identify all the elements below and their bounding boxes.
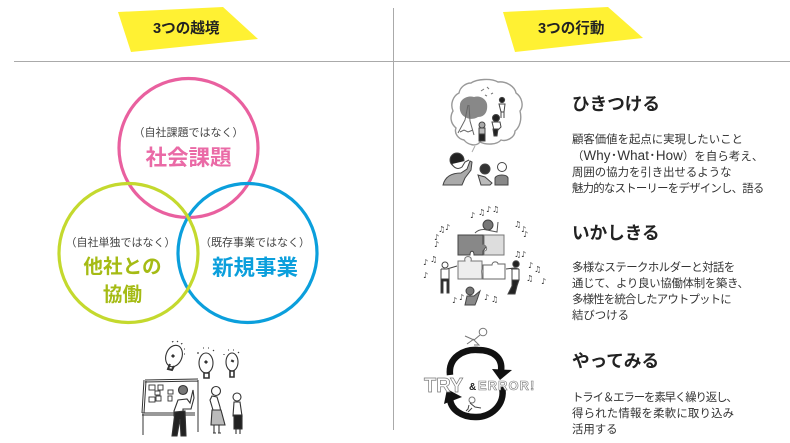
section text: いかしきる: 多様なステークホルダーと対話を bbox=[572, 262, 735, 274]
illustration: speaker and thought bubble bbox=[442, 78, 523, 186]
circle text: new business: 新規事業 bbox=[212, 256, 298, 280]
circle text: social issues bbox=[134, 126, 244, 170]
section text: ひきつける bbox=[572, 133, 764, 195]
music notes: ♫ bbox=[478, 208, 485, 217]
icon: runner figures bbox=[465, 328, 487, 412]
section text: やってみる: トライ＆エラーを素早く繰り返し、 bbox=[572, 392, 737, 404]
circle text: social issues: 社会課題 bbox=[145, 146, 232, 170]
music notes: ♪ bbox=[523, 230, 528, 239]
illustration: jigsaw puzzle team and music notes bbox=[423, 205, 546, 306]
section text: やってみる bbox=[572, 391, 737, 436]
music notes: ♫ bbox=[491, 295, 498, 304]
music notes: ♪ bbox=[484, 293, 489, 302]
circle text: co-creation with other companies: （自社単独ではなく） bbox=[66, 237, 176, 249]
music notes: ♫ bbox=[526, 274, 533, 283]
music notes: ♪ bbox=[459, 293, 464, 302]
section text: ひきつける: 周囲の協力を引き出せるような bbox=[572, 167, 731, 179]
music notes: ♫ bbox=[534, 265, 541, 274]
heading tag: 3つの行動: 3つの行動 bbox=[538, 21, 604, 37]
music notes: ♫ bbox=[438, 225, 445, 234]
section text: いかしきる: 結びつける bbox=[572, 310, 629, 322]
heading tag: 3つの越境 bbox=[118, 7, 258, 52]
section title: やってみる: やってみる bbox=[572, 351, 659, 371]
circle text: co-creation with other companies: 協働 bbox=[103, 284, 142, 306]
section text: いかしきる: 多様性を統合したアウトプットに bbox=[572, 294, 731, 306]
icon: cycle arrows bbox=[450, 350, 503, 417]
section text: ひきつける: （Why･What･How）を自ら考え、 bbox=[572, 148, 763, 163]
music notes: ♪ bbox=[541, 277, 546, 286]
section title: ひきつける: ひきつける bbox=[572, 94, 660, 114]
music notes: ♫ bbox=[430, 255, 437, 264]
illustration: try and error cycle arrows: ERROR! bbox=[478, 378, 535, 393]
music notes: ♪ bbox=[528, 261, 533, 270]
section text: いかしきる: 通じて、より良い協働体制を築き、 bbox=[572, 278, 749, 290]
circle text: co-creation with other companies bbox=[66, 236, 176, 306]
section title: いかしきる: いかしきる bbox=[572, 223, 660, 243]
circle text: co-creation with other companies: 他社との bbox=[83, 256, 162, 278]
music notes: ♪ bbox=[445, 223, 450, 232]
section text: やってみる: 得られた情報を柔軟に取り込み bbox=[572, 408, 734, 420]
music notes: ♫ bbox=[514, 250, 521, 259]
circle text: new business bbox=[200, 236, 310, 280]
music notes bbox=[423, 205, 546, 305]
music notes: ♪ bbox=[452, 296, 457, 305]
music notes: ♪ bbox=[434, 233, 439, 242]
music notes: ♪ bbox=[423, 258, 428, 267]
label: TRY & ERROR!: TRY bbox=[424, 375, 464, 397]
heading tag: 3つの越境: 3つの越境 bbox=[153, 21, 220, 37]
section text: いかしきる bbox=[572, 261, 749, 322]
music notes: ♪ bbox=[486, 205, 491, 214]
music notes: ♫ bbox=[514, 220, 521, 229]
section text: ひきつける: 魅力的なストーリーをデザインし、語る bbox=[572, 183, 764, 195]
illustration: try and error cycle arrows bbox=[424, 328, 535, 420]
music notes: ♪ bbox=[434, 240, 439, 249]
section text: やってみる: 活用する bbox=[572, 424, 618, 436]
section text: ひきつける: 顧客価値を起点に実現したいこと bbox=[572, 134, 743, 146]
venn diagram: three circles bbox=[57, 76, 319, 324]
music notes: ♫ bbox=[492, 205, 499, 214]
illustration: try and error cycle arrows: & bbox=[469, 382, 476, 393]
music notes: ♪ bbox=[423, 271, 428, 280]
circle text: new business: （既存事業ではなく） bbox=[200, 237, 310, 249]
circle text: social issues: （自社課題ではなく） bbox=[134, 127, 244, 139]
heading tag: 3つの行動 bbox=[503, 7, 643, 52]
music notes: ♪ bbox=[470, 211, 475, 220]
music notes: ♪ bbox=[521, 225, 526, 234]
music notes: ♪ bbox=[521, 250, 526, 259]
illustration: people at whiteboard under light bulbs bbox=[142, 340, 243, 436]
